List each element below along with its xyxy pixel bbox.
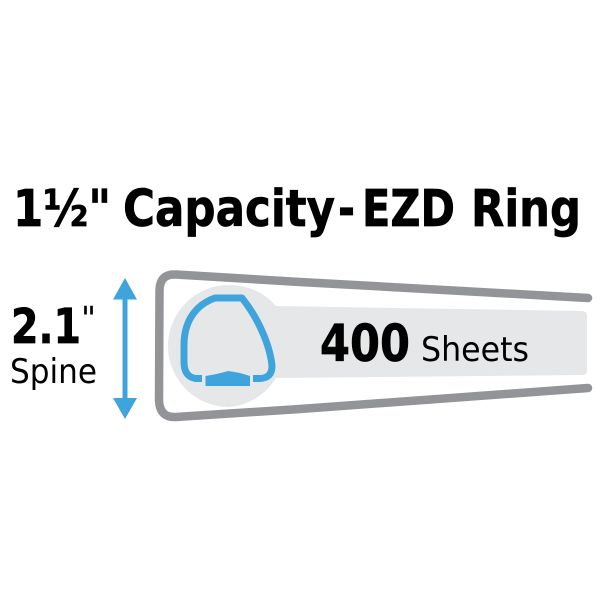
icon: EZD ring bbox=[184, 298, 272, 386]
title: Capacity bbox=[123, 180, 335, 239]
spine measurement label bbox=[10, 299, 97, 392]
spine caption: Spine bbox=[10, 352, 97, 392]
ring clasp bbox=[206, 371, 250, 386]
ring outline bbox=[184, 298, 272, 378]
title: EZD bbox=[362, 180, 455, 239]
binder outline bbox=[159, 274, 588, 417]
title: 1½" bbox=[13, 180, 111, 239]
sheet capacity band bbox=[168, 285, 587, 407]
sheets label: Sheets bbox=[421, 330, 529, 370]
title: - bbox=[338, 180, 355, 239]
arrow: spine height bbox=[113, 278, 137, 419]
spine width value: 2.1 bbox=[11, 299, 81, 355]
title bbox=[13, 180, 581, 239]
sheet count: 400 bbox=[320, 315, 410, 374]
title: Ring bbox=[471, 180, 581, 239]
inch mark: " bbox=[81, 299, 96, 337]
